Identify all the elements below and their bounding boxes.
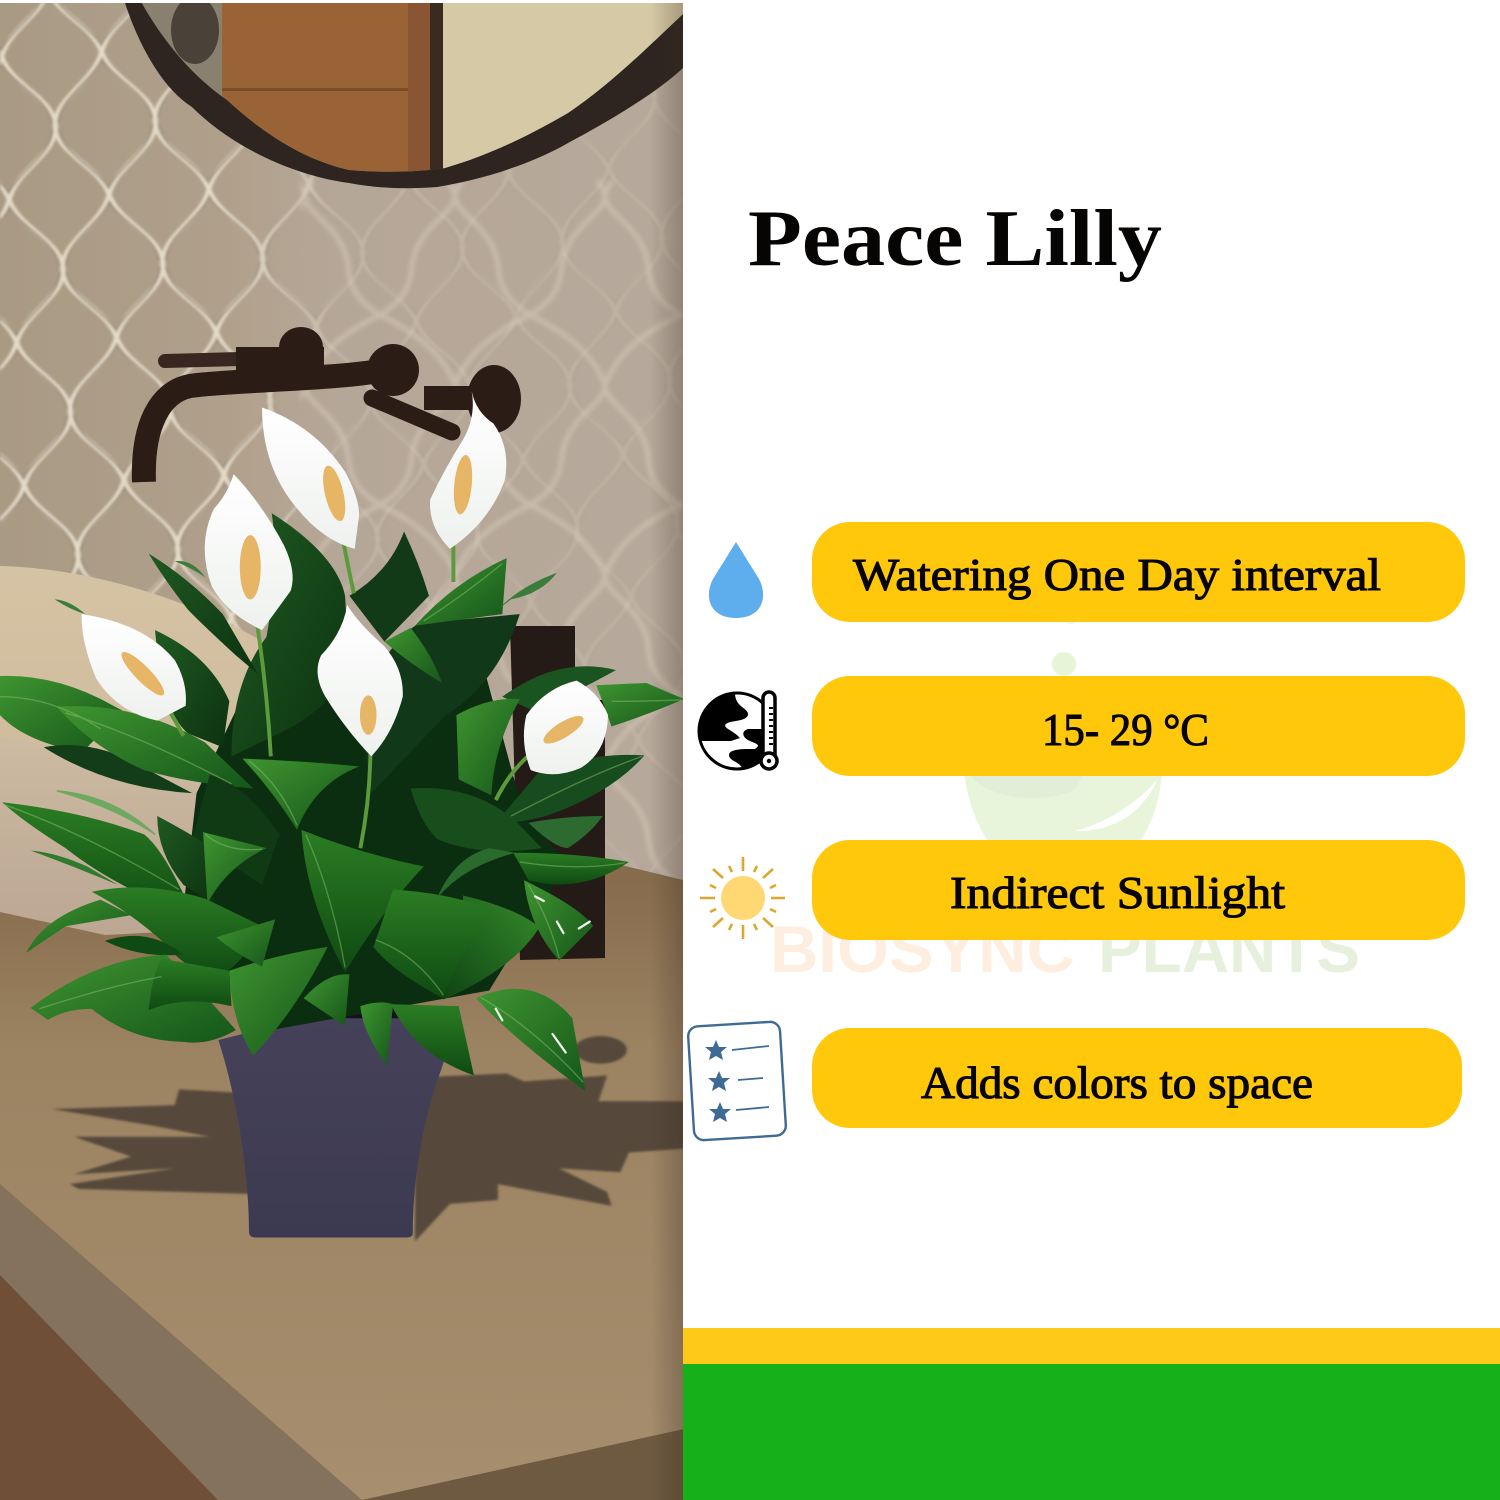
pill: watering: Watering One Day interval — [853, 549, 1381, 600]
pot — [218, 1006, 459, 1237]
counter — [0, 860, 683, 1500]
plant — [0, 391, 684, 1091]
row: watering — [709, 522, 1465, 622]
pill: colors: Adds colors to space — [921, 1057, 1313, 1108]
pill: watering — [812, 522, 1465, 622]
row: colors — [688, 1021, 1462, 1141]
round mirror — [120, 0, 690, 190]
front leaves — [203, 759, 629, 1000]
watermark: Biosync Plants logo: PLANTS — [1098, 912, 1360, 986]
back foliage — [55, 513, 684, 1032]
flower top right — [430, 391, 506, 549]
pill: temperature — [812, 676, 1465, 776]
lower leaves — [26, 887, 585, 1091]
leaf veins and highlights — [0, 564, 681, 1082]
wall faucet — [144, 327, 521, 482]
watermark: Biosync Plants logo — [770, 612, 1360, 986]
pill: temperature: 15- 29 °C — [1042, 704, 1209, 755]
icon: globe with thermometer — [699, 692, 777, 769]
panel: photo of peace lily in a bathroom — [0, 0, 690, 1500]
row: sunlight — [700, 840, 1465, 940]
wall tiles — [0, 3, 683, 880]
pot shadow — [52, 1036, 684, 1241]
stems — [169, 544, 528, 849]
row: temperature — [699, 676, 1465, 776]
flower left upper — [205, 474, 293, 630]
pill: sunlight — [812, 840, 1465, 940]
watermark: Biosync Plants logo: BIOSYNC — [770, 912, 1075, 986]
flower far left — [82, 614, 186, 721]
icon: water drop — [709, 542, 763, 618]
flower top centre — [262, 408, 359, 549]
sink basin — [0, 566, 258, 935]
right edge shade — [656, 3, 683, 1500]
footer bands — [683, 1328, 1500, 1500]
icon: sun — [700, 857, 785, 939]
dark wall bracket — [510, 626, 605, 960]
icon: star list — [688, 1021, 786, 1141]
counter front edge — [0, 1184, 684, 1500]
pill: colors — [812, 1028, 1462, 1128]
side leaves — [0, 676, 644, 917]
flower centre — [318, 605, 403, 756]
spathes — [82, 391, 608, 774]
pill: sunlight: Indirect Sunlight — [950, 867, 1285, 918]
flower right — [524, 681, 608, 774]
title: Peace Lilly — [748, 195, 1162, 283]
